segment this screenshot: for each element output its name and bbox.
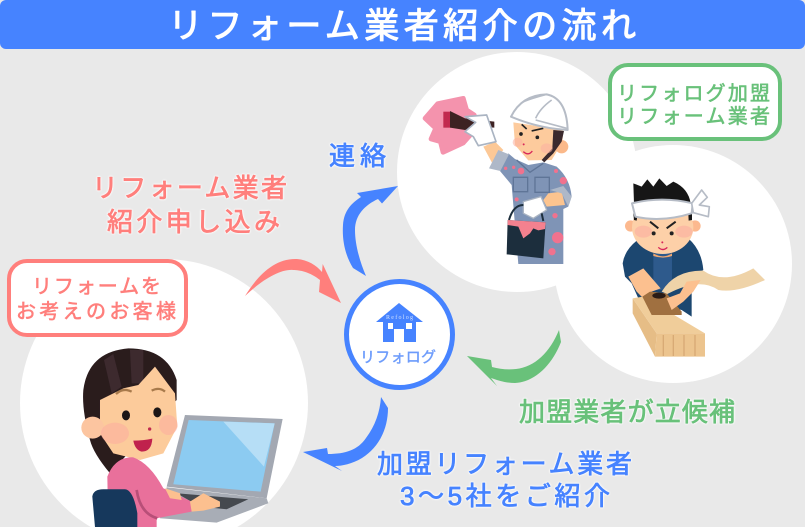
text: request label: リフォーム業者: [92, 173, 287, 203]
text: request label: [92, 173, 287, 237]
title banner: [0, 0, 805, 49]
illustration: painter: [425, 94, 572, 264]
label box: customer: リフォームを: [32, 276, 161, 298]
logo: Refolog centre circle: リフォログ: [360, 349, 436, 366]
arrow: customer to Refolog: [245, 259, 341, 303]
arrow: Refolog to painter: [343, 186, 398, 276]
label box: customer: [9, 261, 186, 335]
panel: painter circle: [397, 52, 637, 292]
logo: Refolog centre circle: [346, 282, 452, 388]
text: contact label: 連絡: [329, 141, 386, 171]
panel: customer circle: [20, 259, 308, 527]
text: candidates label: 加盟業者が立候補: [519, 397, 735, 427]
label box: franchise contractors: リフォログ加盟: [617, 82, 770, 105]
label box: franchise contractors: [610, 65, 780, 139]
illustration: carpenter: [623, 178, 765, 357]
text: introduction label: 3～5社をご紹介: [400, 481, 610, 511]
text: introduction label: [377, 449, 632, 511]
label box: franchise contractors: リフォーム業者: [617, 105, 770, 128]
text: introduction label: 加盟リフォーム業者: [377, 449, 632, 479]
text: request label: 紹介申し込み: [107, 207, 280, 237]
label box: customer: お考えのお客様: [16, 300, 176, 323]
title banner: リフォーム業者紹介の流れ: [168, 7, 636, 46]
arrow: contractor to Refolog: [467, 330, 561, 386]
arrow: Refolog to customer: [303, 397, 388, 471]
illustration: customer at laptop: [81, 348, 283, 527]
panel: carpenter circle: [554, 145, 792, 383]
icon: house: [376, 303, 423, 342]
logo: Refolog centre circle: Refolog: [386, 314, 413, 321]
